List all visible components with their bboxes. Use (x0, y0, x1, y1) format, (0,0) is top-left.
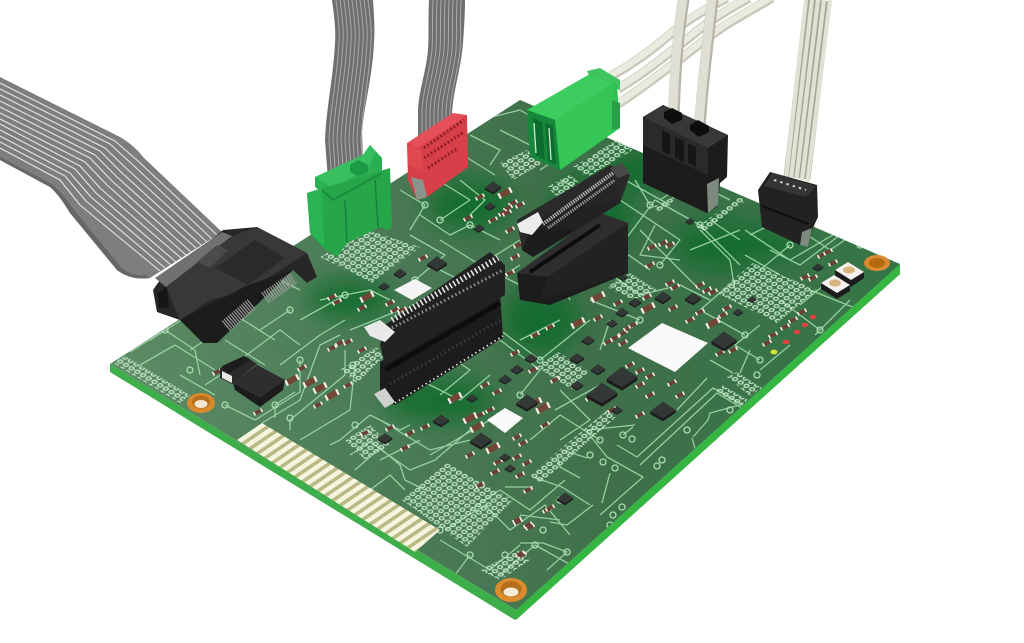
circuit traces (130, 110, 885, 575)
board (110, 100, 900, 620)
power inductor (220, 356, 285, 407)
green block connector (527, 68, 620, 170)
surface mount resistors (213, 190, 837, 557)
black wire-to-board housing (643, 105, 728, 213)
ribbon cable to red connector (418, 0, 465, 146)
left ribbon cable (0, 77, 222, 279)
via fields (113, 140, 817, 580)
green IDC connector (307, 145, 392, 257)
red IDC connector (407, 113, 468, 200)
small chips (378, 182, 823, 505)
white chip pads (487, 323, 708, 433)
thick wires into black housing (673, 0, 713, 125)
FPC connector, upper and lower black blocks (517, 163, 630, 305)
cream wires behind green connector (611, 0, 772, 104)
mounting hole: right (864, 255, 890, 271)
tact switches (821, 262, 864, 299)
ribbon cable to green connector (325, 0, 374, 180)
thin wire bundle (786, 0, 830, 182)
mounting hole: left (187, 393, 215, 413)
gold edge fingers (237, 423, 440, 552)
mounting hole: bottom (495, 578, 527, 602)
small black housing (758, 172, 818, 247)
board-to-board connector, black comb (364, 252, 505, 408)
black right-angle ribbon connector (153, 227, 317, 343)
LEDs (770, 315, 816, 354)
